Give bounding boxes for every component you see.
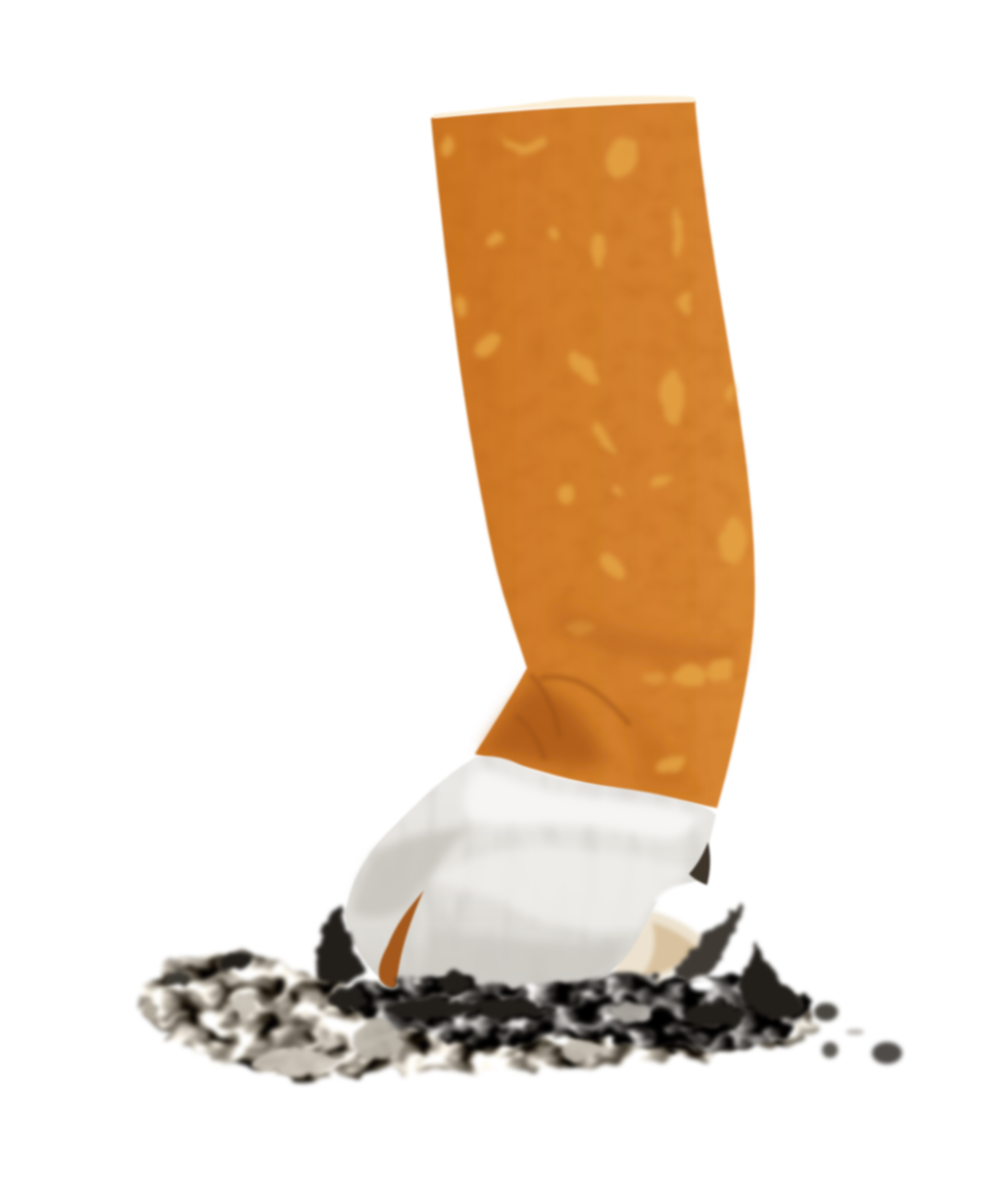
white gap between clumps [690,979,714,991]
light mottled ash mass [138,951,814,1077]
paper wrinkle texture [345,756,716,999]
cigarette filter [431,96,755,808]
crease shading [484,600,742,795]
stray ash fragments [814,1003,902,1064]
pure white gap by paper edge [655,885,712,916]
dark mottled char band [340,973,807,1051]
right spike [672,902,743,979]
exposed tobacco end [610,905,708,985]
char behind paper, left [318,905,365,983]
orange tear in paper [379,890,424,988]
filter speckles [442,132,747,776]
pale ash flakes [142,993,652,1075]
charred paper tip [689,842,710,885]
right cone [738,940,803,1020]
paper fold highlights [352,768,700,995]
filter mottling overlay [431,101,755,808]
dark char clumps [166,902,803,1027]
filter top paper edge [434,96,695,118]
crumpled white paper [345,756,716,999]
crumple lines [515,674,630,760]
ash pile [138,902,902,1077]
